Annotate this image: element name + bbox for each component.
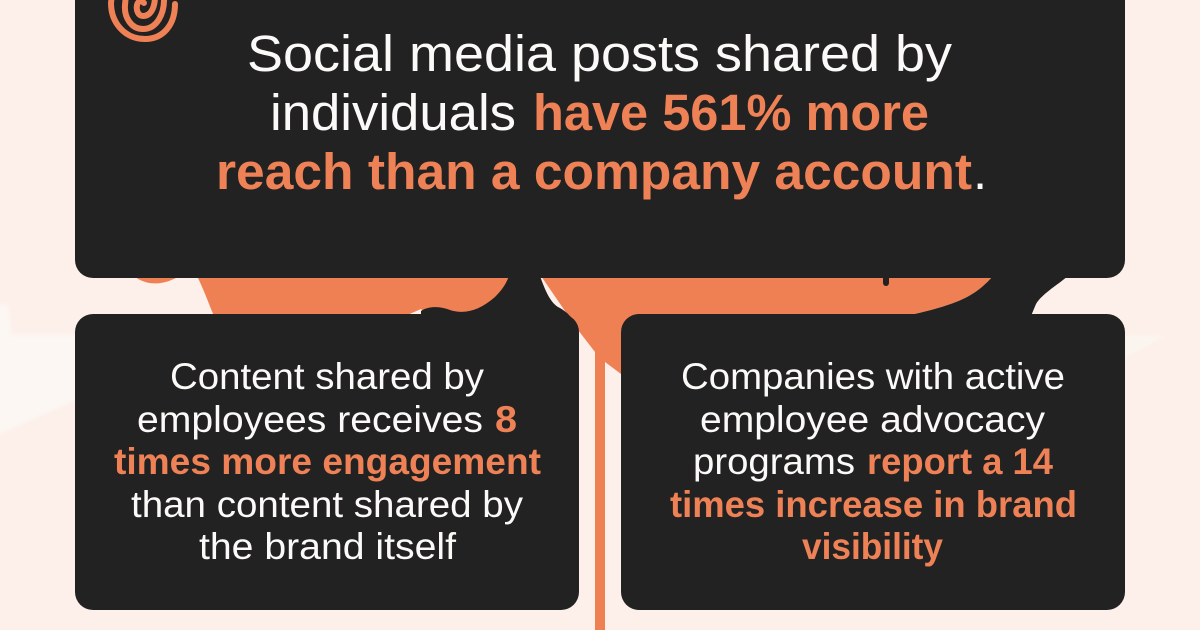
text: engagement statistic: employees receives xyxy=(137,399,483,440)
icon: spiral xyxy=(111,0,175,39)
heading: main statement: Social media posts shared by xyxy=(247,25,953,82)
text: engagement statistic: times more engagement xyxy=(114,441,541,482)
text: engagement statistic: 8 xyxy=(495,399,517,440)
text: visibility statistic xyxy=(670,356,1077,567)
panel: main statistic xyxy=(75,0,1125,278)
panel: employee engagement xyxy=(75,314,579,610)
heading: main statement: individuals xyxy=(270,84,516,141)
text: visibility statistic: Companies with active xyxy=(681,356,1065,397)
text: engagement statistic: the brand itself xyxy=(199,526,457,567)
text: visibility statistic: visibility xyxy=(802,526,943,567)
text: visibility statistic: report a 14 xyxy=(867,441,1053,482)
text: engagement statistic: than content shared by xyxy=(131,484,524,525)
heading: main statement: . xyxy=(973,143,987,200)
dark splatter connecting the cards xyxy=(421,276,1068,340)
text: engagement statistic: Content shared by xyxy=(170,356,485,397)
text: visibility statistic: times increase in brand xyxy=(670,484,1077,525)
heading: main statement: have 561% more xyxy=(533,84,929,141)
text: engagement statistic xyxy=(114,356,541,567)
heading: main statement: reach than a company account xyxy=(216,143,972,200)
text: visibility statistic: employee advocacy xyxy=(700,399,1046,440)
panel: brand visibility xyxy=(621,314,1125,610)
orange paint drip xyxy=(134,276,993,630)
heading: main statement xyxy=(216,25,987,200)
text: visibility statistic: programs xyxy=(693,441,855,482)
